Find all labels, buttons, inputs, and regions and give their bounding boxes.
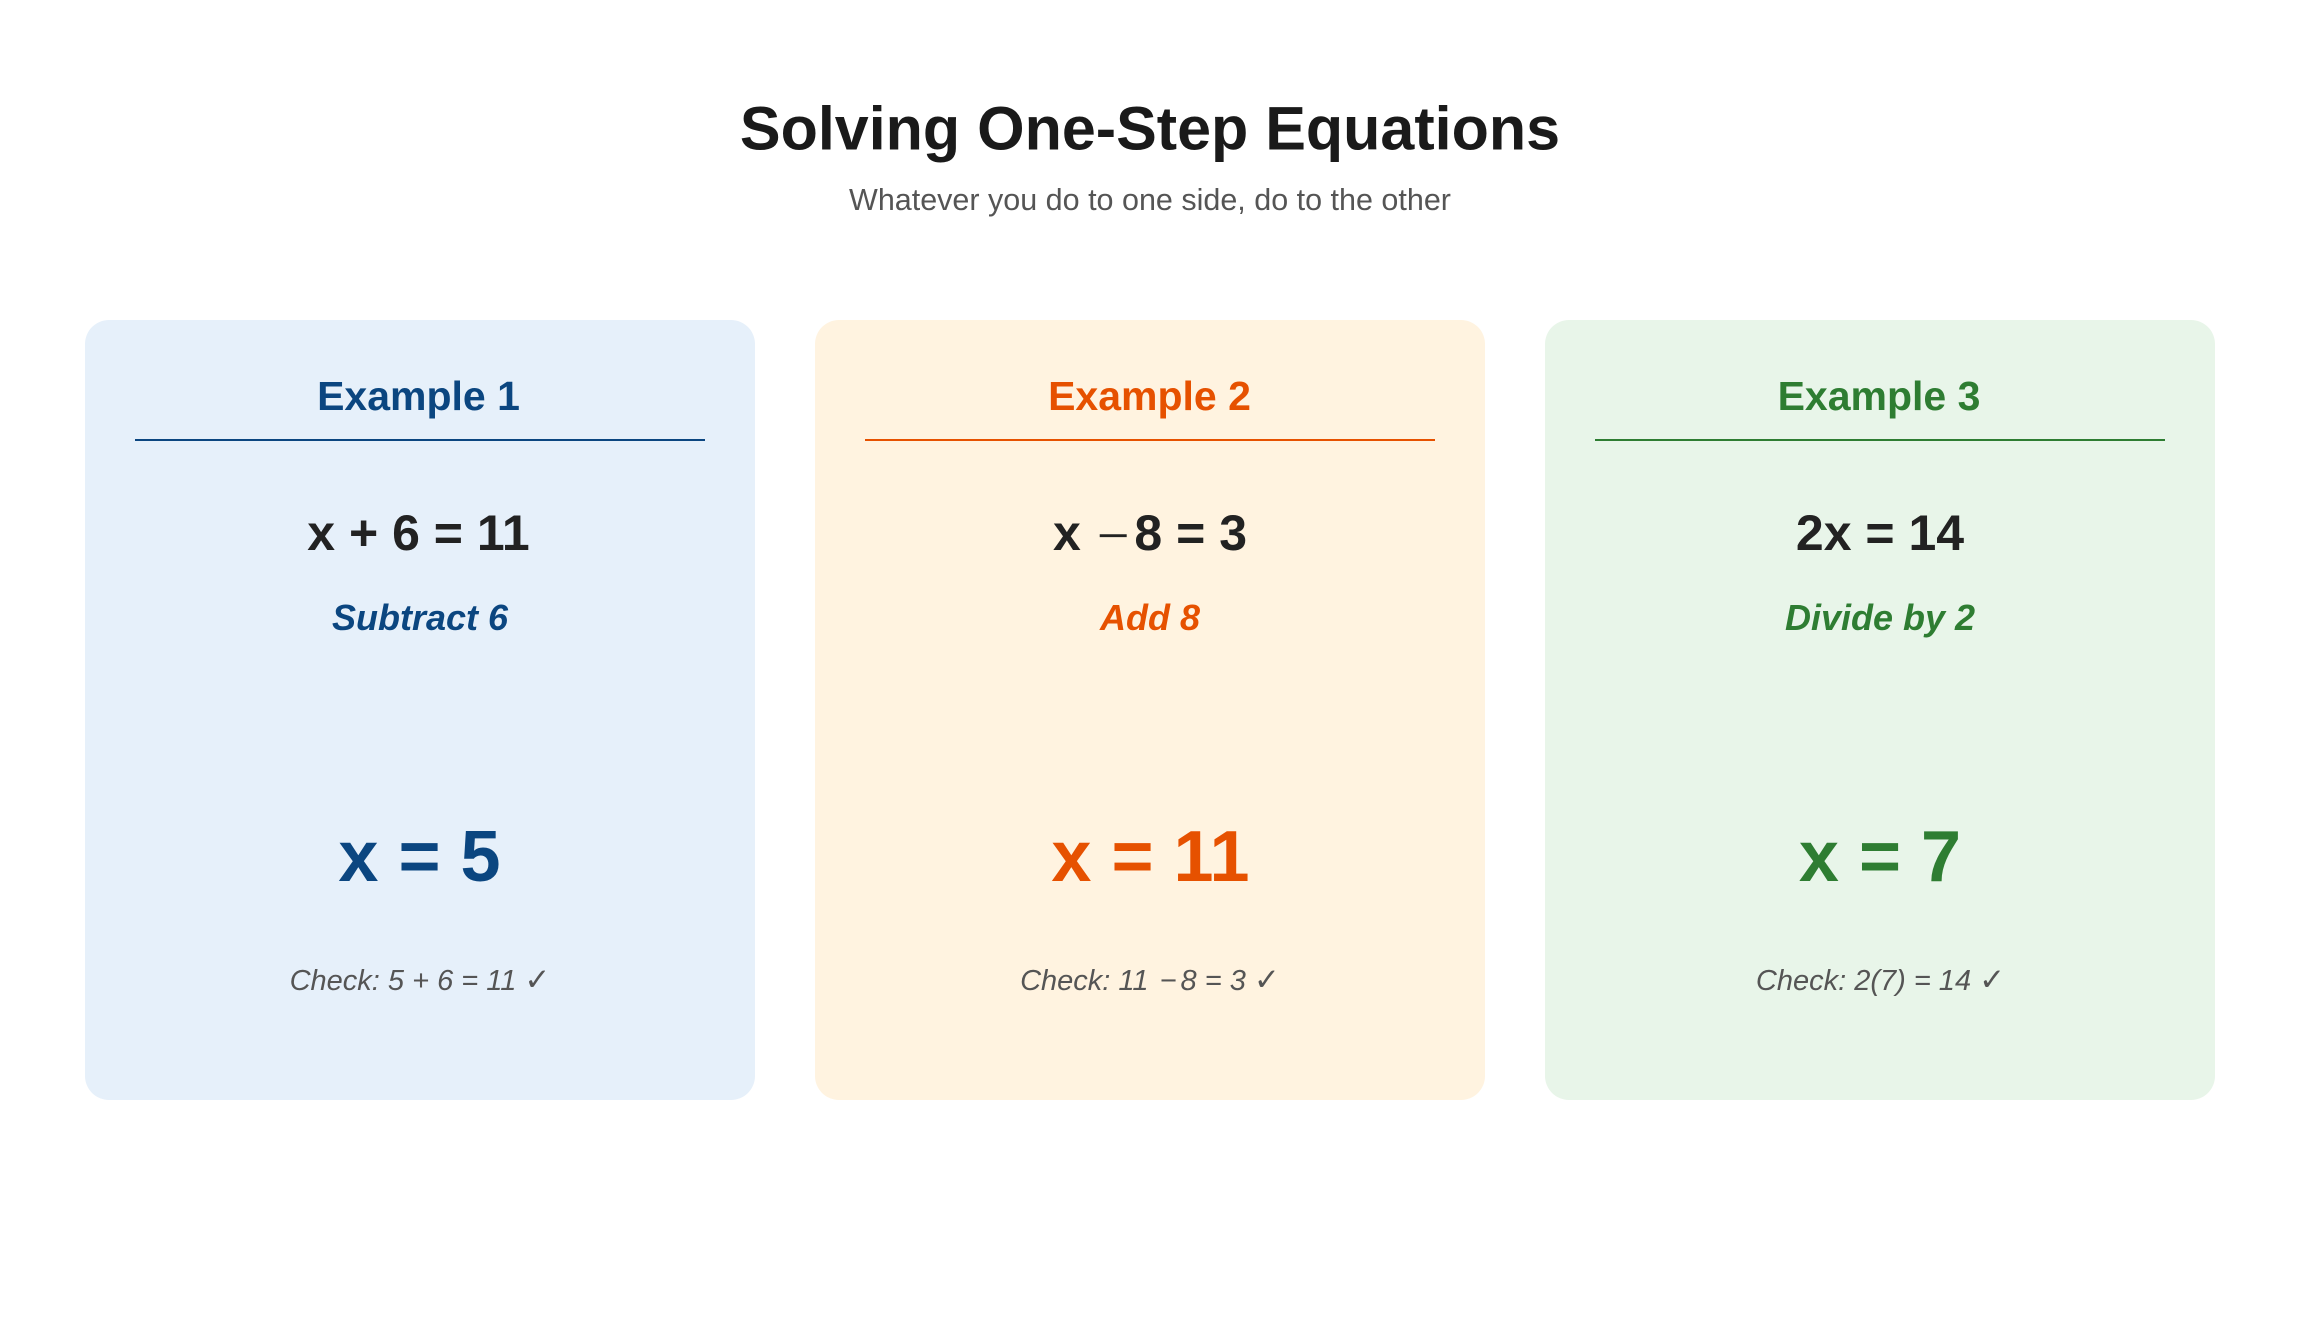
panel: example 3 xyxy=(1545,320,2215,1100)
operation: Divide by 2 xyxy=(1785,597,1975,638)
operation: Subtract 6 xyxy=(332,597,509,638)
title: Solving One-Step Equations xyxy=(740,94,1560,162)
equation: x xyxy=(1053,505,1081,561)
answer: x = 11 xyxy=(1051,817,1250,897)
check: Check: 5 + 6 = 11 ✓ xyxy=(290,962,550,998)
panel background xyxy=(815,320,1485,1100)
panel background xyxy=(85,320,755,1100)
check: Check: 11 −8 = 3 ✓ xyxy=(1020,962,1280,998)
heading: Example 3 xyxy=(1778,373,1980,419)
panel: example 2 xyxy=(815,320,1485,1100)
operation: Add 8 xyxy=(1099,597,1200,638)
heading: Example 2 xyxy=(1048,373,1251,419)
equation: − xyxy=(1097,503,1129,568)
subtitle: Whatever you do to one side, do to the other xyxy=(849,183,1451,217)
heading: Example 1 xyxy=(317,373,520,419)
panel: example 1 xyxy=(85,320,755,1100)
check: Check: 2(7) = 14 ✓ xyxy=(1756,962,2005,998)
equation: 2x = 14 xyxy=(1796,505,1964,561)
answer: x = 5 xyxy=(338,817,501,897)
equation: 8 = 3 xyxy=(1134,505,1247,561)
equation: x + 6 = 11 xyxy=(307,505,530,561)
answer: x = 7 xyxy=(1799,817,1961,897)
panel background xyxy=(1545,320,2215,1100)
